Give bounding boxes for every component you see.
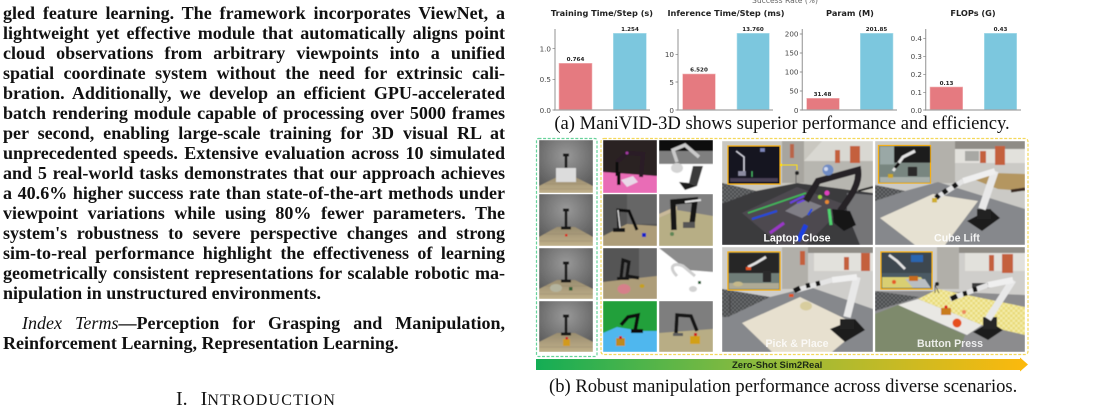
abstract text: [3, 3, 505, 303]
caption b: (b) Robust manipulation performance across diverse scenarios.: [549, 376, 1017, 397]
chart: parameters: 50: [789, 86, 799, 96]
real photo: cube lift: [875, 141, 1025, 245]
abstract text: batch rendering module capable of processing over 5000 frames: [3, 103, 505, 123]
abstract text: bration. Additionally, we develop an efficient GPU-accelerated: [3, 83, 505, 103]
sim tile: cube lift: [539, 194, 593, 246]
randomized tile: green and blue room: [603, 301, 657, 352]
label: button press: Button Press: [917, 338, 983, 350]
abstract text: nipulation in unstructured environments.: [3, 283, 321, 303]
abstract text: gled feature learning. The framework incorporates ViewNet, a: [3, 3, 505, 23]
inset: laptop close view: [728, 146, 780, 184]
inset: pick and place view: [728, 252, 780, 290]
chart: parameters: 0: [794, 106, 799, 115]
arrow: inset pointer: [782, 165, 797, 170]
abstract text: lightweight yet effective module that automatically aligns point: [3, 23, 505, 43]
randomized tile: white floor checker: [659, 248, 713, 292]
abstract text: viewpoint variations while using 80% fewer parameters. The: [3, 203, 505, 223]
abstract text: per second, enabling large-scale training for 3D visual RL at: [3, 123, 505, 143]
chart: inference time per step: Inference Time/Step (ms): [667, 8, 785, 18]
chart: training time per step: 1.254: [621, 27, 639, 33]
inset: button press view: [881, 252, 932, 289]
chart: parameters: 150: [785, 48, 799, 58]
chart: inference time per step: 5: [669, 78, 674, 87]
real photo: laptop close: [722, 141, 873, 245]
randomized tile: white floor laptop: [659, 140, 713, 190]
chart: FLOPs: FLOPs (G): [950, 8, 996, 18]
randomized tile: blue cube: [603, 194, 657, 246]
sim tile: laptop close: [539, 140, 593, 193]
chart: training time per step: 0.5: [540, 75, 551, 84]
sim tile: pick and place: [539, 248, 593, 299]
chart: FLOPs: 0.13: [940, 81, 954, 87]
chart: FLOPs: [911, 8, 1021, 115]
real photo: pick and place: [722, 247, 873, 352]
chart: inference time per step: 6.520: [690, 68, 708, 74]
abstract text: cloud observations from arbitrary viewpoints into a unified: [3, 43, 505, 63]
caption a: (a) ManiVID-3D shows superior performance and efficiency.: [554, 113, 1010, 134]
chart: parameters: Param (M): [826, 8, 874, 18]
label: pick and place: Pick & Place: [765, 338, 829, 350]
panel: training environments dashed frame: [536, 138, 597, 356]
chart: FLOPs: 0.2: [911, 70, 922, 79]
chart: inference time per step: 0: [669, 106, 674, 115]
abstract text: spatial coordinate system without the need for extrinsic cali-: [3, 63, 505, 83]
chart: FLOPs: 0.0: [911, 106, 922, 115]
chart: inference time per step: 13.760: [742, 27, 764, 33]
randomized tile: pink bowl: [603, 248, 657, 299]
chart: training time per step: 0.764: [567, 57, 584, 63]
chart: training time per step: 0.0: [540, 106, 551, 115]
chart: FLOPs: 0.1: [911, 88, 922, 97]
abstract text: a 40.6% higher success rate than state-of-the-art methods under: [3, 183, 505, 203]
chart: training time per step: Training Time/Step (s): [551, 8, 653, 18]
abstract text: and 5 real-world tasks demonstrates that our approach achieves: [3, 163, 505, 183]
randomized tile: pink table: [603, 140, 657, 193]
abstract text: unprecedented speeds. Extensive evaluation across 10 simulated: [3, 143, 505, 163]
abstract text: geometrically consistent representations for scalable robotic ma-: [3, 263, 505, 283]
chart: parameters: 201.85: [866, 27, 887, 33]
abstract text: sim-to-real performance highlight the effectiveness of learning: [3, 243, 505, 263]
chart: parameters: 100: [785, 68, 799, 76]
panel: randomized and real-world dashed frame: [601, 138, 1028, 354]
chart: parameters: 200: [785, 30, 799, 38]
arrow: zero-shot sim2real: [536, 358, 1028, 372]
chart: inference time per step: [665, 8, 785, 115]
chart: training time per step: [540, 8, 653, 115]
inset: cube lift view: [878, 146, 930, 183]
real photo: button press: [875, 247, 1025, 352]
index terms: Reinforcement Learning, Representation Learning.: [3, 333, 398, 353]
chart: inference time per step: 10: [665, 50, 674, 59]
section heading: introduction: I. INTRODUCTION: [176, 388, 336, 410]
chart: FLOPs: 0.3: [911, 52, 922, 61]
chart: FLOPs: 0.43: [994, 27, 1008, 33]
index terms: Index Terms—Perception for Grasping and Manipulation,: [22, 313, 505, 333]
chart: parameters: [785, 8, 897, 115]
randomized tile: beige floor: [659, 194, 713, 246]
arrow: zero-shot sim2real: Zero-Shot Sim2Real: [732, 360, 822, 371]
sim tile: button press: [539, 301, 593, 352]
chart: FLOPs: 0.4: [911, 34, 922, 43]
index terms: [3, 313, 505, 353]
label: cube lift: Cube Lift: [934, 232, 980, 244]
chart: parameters: 31.48: [814, 92, 831, 98]
label: laptop close: Laptop Close: [763, 232, 831, 244]
chart: training time per step: 1.0: [540, 44, 551, 54]
abstract text: system's robustness to severe perspective changes and strong: [3, 223, 505, 243]
randomized tile: grey wall button: [659, 301, 713, 352]
